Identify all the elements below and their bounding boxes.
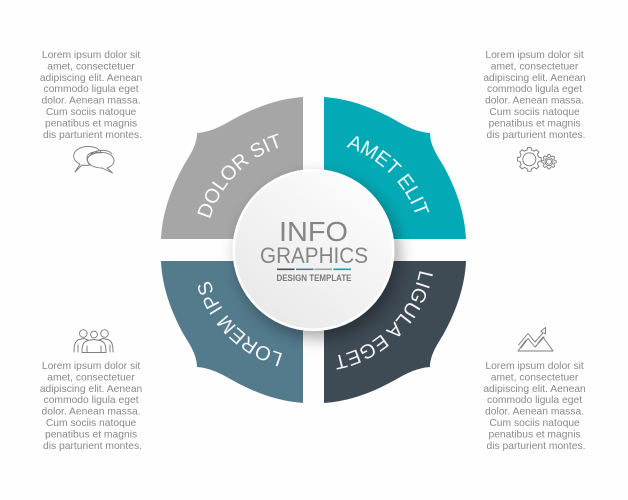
text block: top right: Cum sociis natoque [489,107,580,118]
text block: bottom left: dis parturient montes. [43,441,142,452]
text block: bottom left: penatibus et magnis [45,429,137,440]
text block: top left: dolor. Aenean massa. [42,96,141,107]
text block: bottom left: dolor. Aenean massa. [42,407,141,418]
panel: dolor sit [161,97,303,239]
center title: graphics: GRAPHICS [260,243,368,268]
text block: bottom right: adipiscing elit. Aenean [483,384,586,395]
panel: ligula eget [324,261,466,403]
text block: top left: Cum sociis natoque [46,107,137,118]
icon: people [74,330,113,352]
text block: top right: penatibus et magnis [488,118,581,129]
text block: top left: adipiscing elit. Aenean [40,73,143,84]
text block: top right: dis parturient montes. [486,130,586,141]
label: lorem ips: LOREM IPS [198,282,282,366]
text block: bottom left: Lorem ipsum dolor sit [42,361,140,372]
text block: top right: commodo ligula eget [487,84,582,95]
text block: bottom right: dolor. Aenean massa. [485,407,584,418]
center subtitle: DESIGN TEMPLATE [276,273,352,283]
text block: top left: Lorem ipsum dolor sit [42,50,140,61]
text block: bottom right: dis parturient montes. [486,441,586,452]
text block: bottom left: adipiscing elit. Aenean [40,384,143,395]
label: dolor sit: DOLOR SIT [197,134,278,218]
center title: info: INFO [279,216,348,247]
text block: top right: Lorem ipsum dolor sit [485,50,584,61]
text block: top left: dis parturient montes. [43,130,142,141]
icon: gears [517,147,556,171]
text block: bottom right: Lorem ipsum dolor sit [485,361,584,372]
text block: bottom left: amet, consectetuer [47,372,135,383]
text block: top left: penatibus et magnis [45,118,137,129]
colour key bars [277,268,351,270]
text block: bottom right: commodo ligula eget [487,395,582,406]
center circle [232,169,394,331]
text block: top right: dolor. Aenean massa. [485,96,584,107]
text block: top left: commodo ligula eget [44,84,139,95]
text block: bottom right: penatibus et magnis [488,429,581,440]
text block: top right: amet, consectetuer [491,61,579,72]
text block: bottom left: commodo ligula eget [44,395,139,406]
text block: top left: amet, consectetuer [47,61,135,72]
panel: amet elit [324,97,466,239]
icon: mountains with rising arrow [518,328,553,351]
text block: bottom left: Cum sociis natoque [46,418,137,429]
text block: bottom right: amet, consectetuer [491,372,579,383]
panel: lorem ips [161,261,303,403]
icon: speech bubbles [74,146,114,173]
label: ligula eget: LIGULA EGET [336,271,433,370]
text block: top right: adipiscing elit. Aenean [483,73,586,84]
label: amet elit: AMET ELIT [346,136,430,212]
text block: bottom right: Cum sociis natoque [489,418,580,429]
